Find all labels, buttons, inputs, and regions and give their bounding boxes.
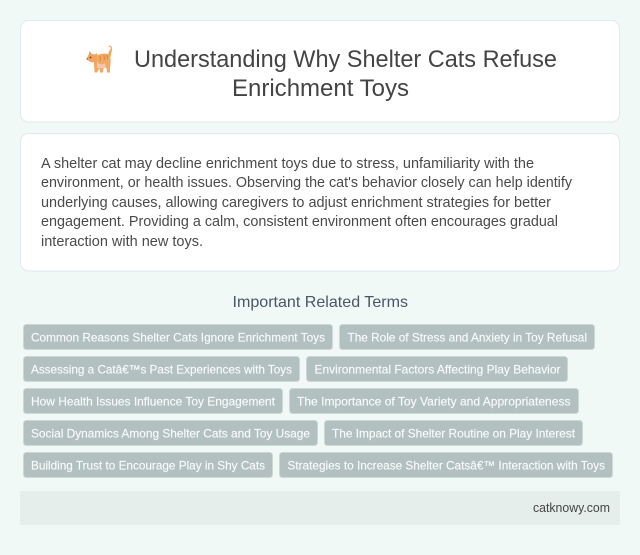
description text: engagement. Providing a calm, consistent environment often encourages gradual [41,214,558,230]
tag: Assessing a Catâ€™s Past Experiences with Toys [31,362,292,376]
tag: How Health Issues Influence Toy Engagement [31,394,276,408]
tag [24,420,318,446]
tag [24,452,272,478]
tag [24,356,300,382]
tag: The Role of Stress and Anxiety in Toy Refusal [348,330,587,344]
icon: orange cat [86,46,112,72]
tag [280,452,612,478]
panel: related term tags [24,324,612,478]
description text [41,156,573,250]
tag: Strategies to Increase Shelter Catsâ€™ Interaction with Toys [288,458,605,472]
tag [290,388,578,414]
description text: underlying causes, allowing caregivers to adjust enrichment strategies for better [41,195,551,211]
tag [24,324,332,350]
description text: interaction with new toys. [41,234,203,250]
description text: environment, or health issues. Observing the cat's behavior closely can help identify [41,175,573,191]
tag [24,388,282,414]
tag: Common Reasons Shelter Cats Ignore Enrichment Toys [31,330,325,344]
title text: Enrichment Toys [232,75,409,102]
panel: title card [20,20,620,122]
title text: Understanding Why Shelter Cats Refuse [134,46,557,73]
footer source text: catknowy.com [533,500,610,515]
tag: Building Trust to Encourage Play in Shy Cats [31,458,265,472]
panel: description card [20,134,620,271]
footer bar [20,491,620,525]
tag: Environmental Factors Affecting Play Behavior [314,362,560,376]
description text: A shelter cat may decline enrichment toys due to stress, unfamiliarity with the [41,156,534,172]
tag [306,356,568,382]
tag: Social Dynamics Among Shelter Cats and Toy Usage [31,426,310,440]
tag [324,420,582,446]
heading: important related terms: Important Related Terms [232,294,408,311]
title text [134,46,557,102]
tag: The Impact of Shelter Routine on Play Interest [332,426,576,440]
tag: The Importance of Toy Variety and Appropriateness [297,394,570,408]
tag [340,324,594,350]
